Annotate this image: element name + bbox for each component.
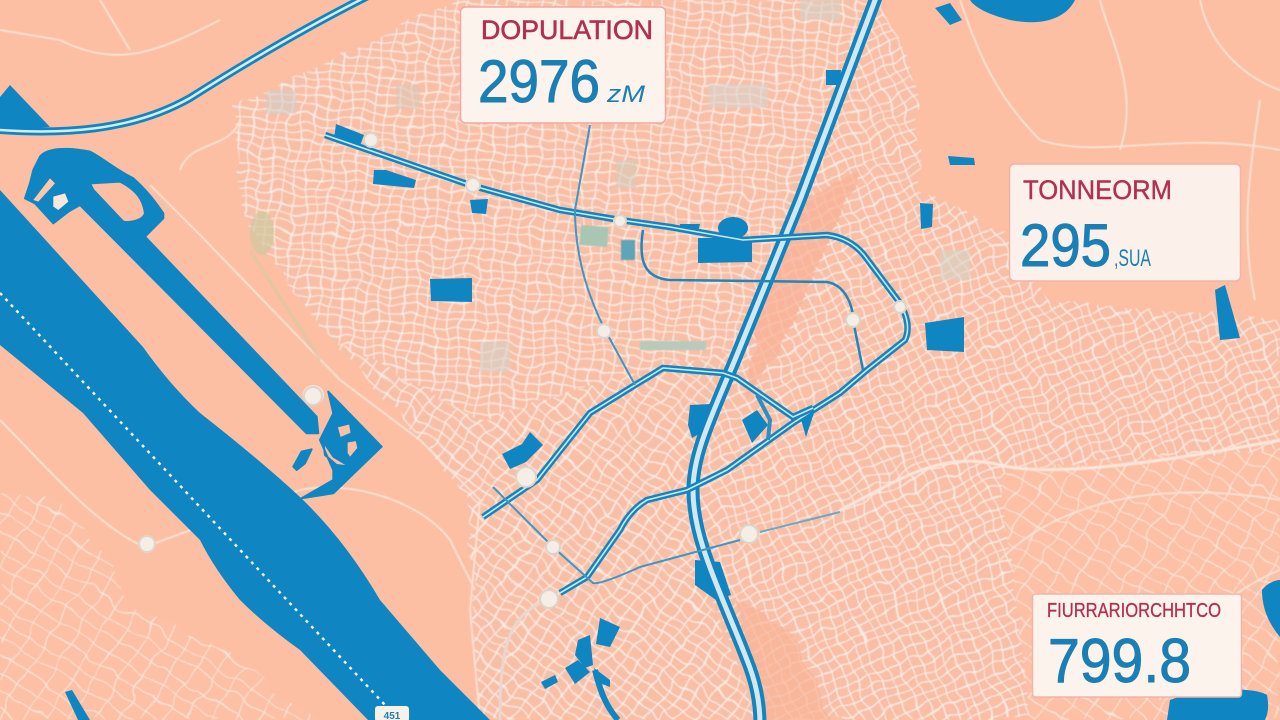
callout: population — [460, 7, 666, 123]
central highway — [693, 0, 877, 720]
top-left water — [0, 85, 50, 130]
metro line: south branch — [483, 368, 813, 517]
canal and lakes — [25, 149, 382, 498]
callout heading: DOPULATION — [481, 15, 653, 45]
callout: tonneorm — [1010, 164, 1240, 281]
thin blue lines — [493, 125, 863, 720]
callout unit: ,SUA — [1114, 245, 1151, 272]
road marker — [375, 706, 409, 720]
metro line: north loop — [325, 135, 908, 593]
callout unit: zM — [606, 81, 645, 108]
callout: bottom right — [1032, 594, 1242, 697]
river dashed centre line — [0, 293, 385, 705]
callout value: 295 — [1020, 212, 1111, 279]
callout heading: FIURRARIORCHHTCO — [1047, 600, 1221, 622]
river — [0, 190, 490, 720]
callout value: 799.8 — [1048, 627, 1191, 696]
parks and pale districts — [250, 0, 970, 372]
callout value: 2976 — [478, 48, 600, 115]
callout heading: TONNEORM — [1023, 175, 1172, 205]
north-west highway — [0, 0, 370, 131]
station nodes — [139, 133, 906, 608]
